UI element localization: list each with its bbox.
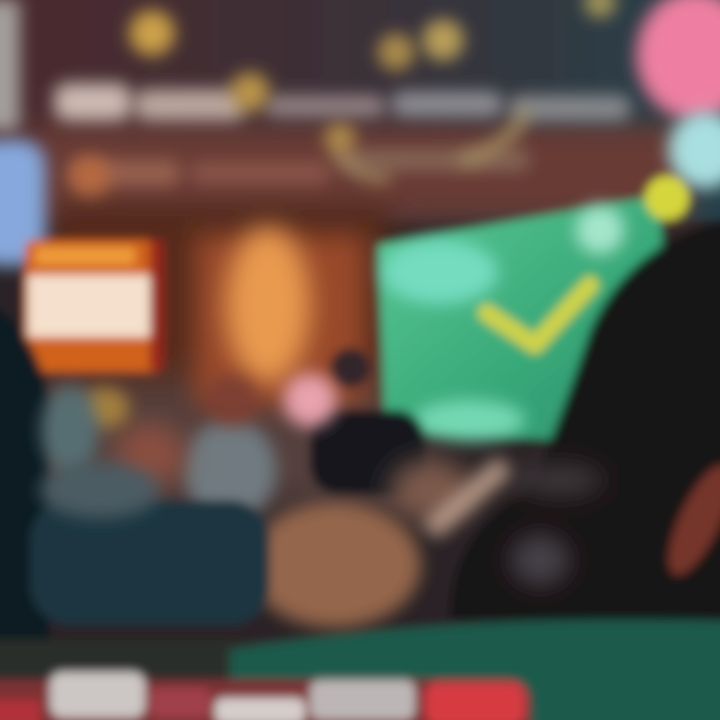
decorative lights (70, 0, 615, 196)
green chart board (378, 176, 689, 440)
silhouette right (450, 215, 720, 620)
foreground dark figure left (0, 295, 270, 650)
poker chips (0, 672, 530, 720)
green poker table (0, 620, 720, 720)
pink flower top right (637, 0, 720, 188)
heading: blurred title text (55, 84, 630, 186)
seated players (81, 348, 505, 627)
glowing pillar (195, 227, 365, 405)
left edge figure (0, 0, 45, 265)
flag panel (25, 240, 164, 372)
icon: yellow check mark (487, 285, 590, 345)
